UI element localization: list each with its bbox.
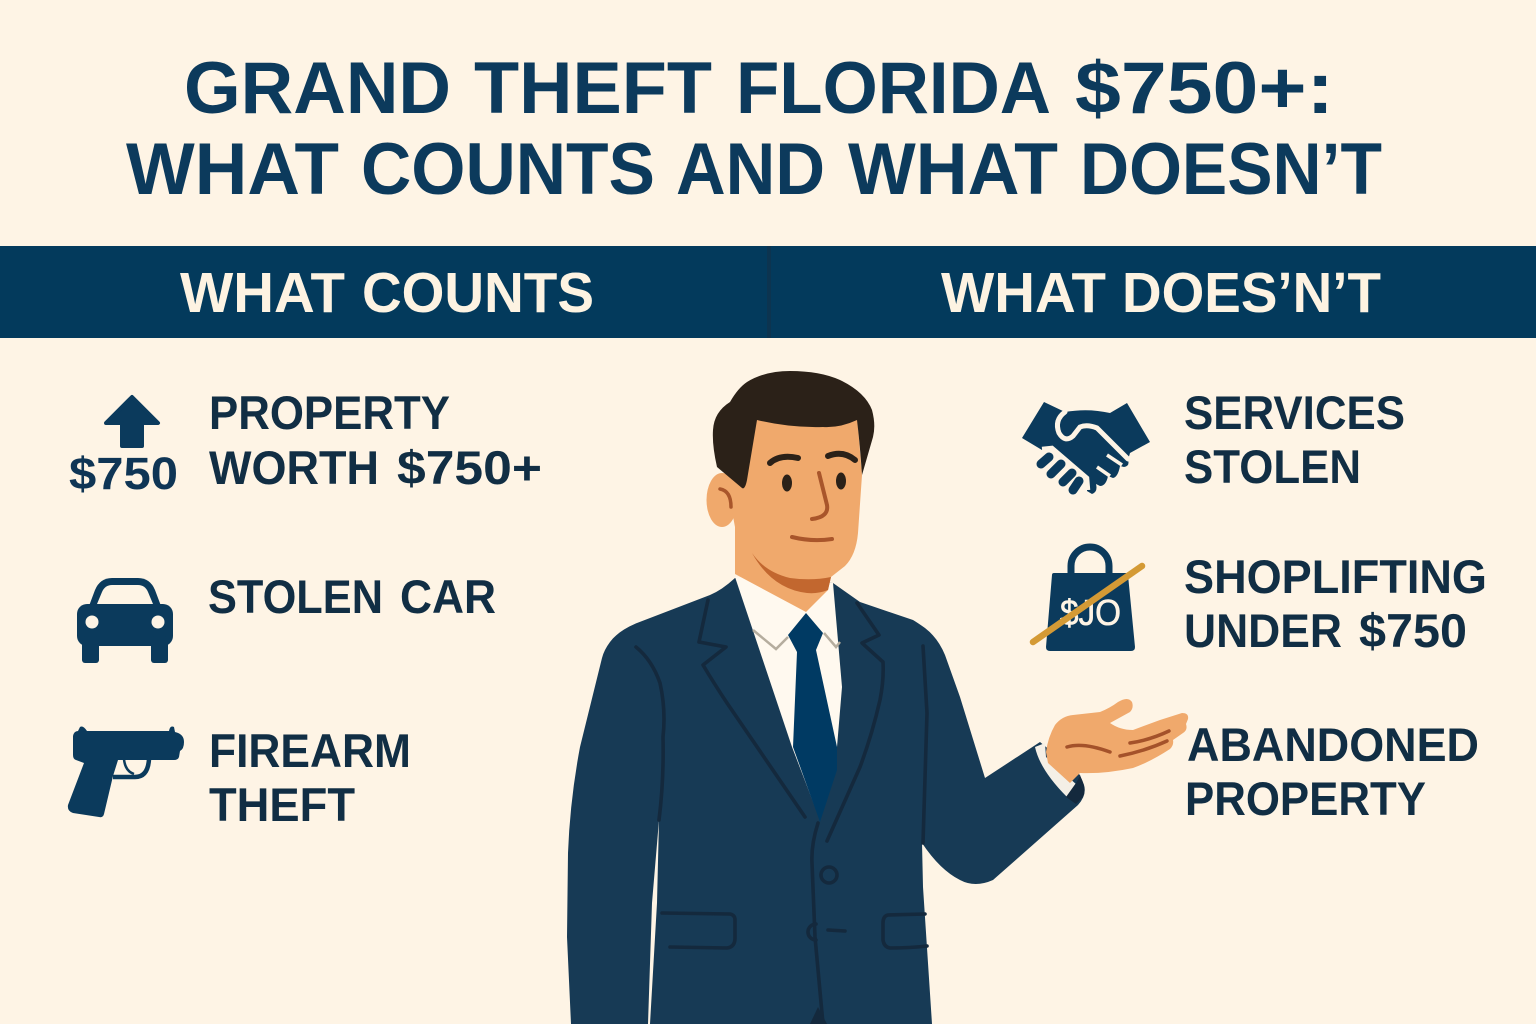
heading: what counts [180,261,594,325]
jacket vent shadow [810,1007,827,1024]
text: services stolen [1184,386,1405,493]
icon: shopping bag crossed out [1033,547,1142,651]
text: stolen car [208,570,496,623]
shirt [735,577,842,820]
text: services stolen: STOLEN [1184,440,1361,493]
text: abandoned property [1185,718,1479,825]
text: property worth $750+: PROPERTY [209,386,450,439]
heading: what doesn't [941,261,1381,325]
title: GRAND [184,48,451,129]
text: shoplifting under $750 [1184,550,1487,657]
heading: what counts: COUNTS [362,261,594,325]
heading: what doesn't: DOES’N’T [1122,261,1381,325]
title: COUNTS [361,129,655,210]
text: stolen car: STOLEN [208,570,383,623]
icon: shopping bag crossed out: $JO [1060,592,1121,633]
title: WHAT [848,129,1058,210]
shirt collar lines [753,630,840,649]
panel: what doesn't [1022,386,1487,825]
hand [1046,699,1188,783]
text: property worth $750+ [209,386,542,494]
icon: up arrow with $750: $750 [69,448,178,499]
palm lines [1067,731,1169,756]
icon: car [77,578,173,663]
text: shoplifting under $750: $750 [1359,604,1467,657]
illustration: man in suit [567,371,1188,1024]
text: abandoned property: ABANDONED [1187,718,1479,771]
text: services stolen: SERVICES [1184,386,1405,439]
neck and face [706,371,874,612]
icon: handshake [1022,402,1150,494]
text: property worth $750+: $750+ [397,441,542,494]
text: firearm theft [209,724,411,831]
title: AND [676,129,825,210]
text: firearm theft: THEFT [209,778,355,831]
icon: handgun [68,726,184,817]
text: abandoned property: PROPERTY [1185,772,1426,825]
shirt cuff [1035,743,1077,797]
text: stolen car: CAR [400,570,496,623]
title: DOESN’T [1080,129,1382,210]
suit jacket [567,578,1085,1024]
text: shoplifting under $750: SHOPLIFTING [1184,550,1487,603]
sleeve end [1066,776,1084,804]
panel: what counts [68,386,542,831]
title [126,48,1382,210]
text: shoplifting under $750: UNDER [1184,604,1342,657]
heading: what doesn't: WHAT [941,261,1106,325]
text: firearm theft: FIREARM [209,724,411,777]
icon: up arrow with $750 [69,397,178,499]
text: property worth $750+: WORTH [209,441,379,494]
title: FLORIDA [736,48,1051,129]
title: WHAT [126,129,339,210]
suit detail lines [636,600,927,1024]
tie [788,613,837,822]
hair [713,371,874,488]
heading: what counts: WHAT [180,261,345,325]
title: THEFT [474,48,712,129]
banner: section headings [0,246,1536,338]
title: $750+: [1075,48,1334,129]
